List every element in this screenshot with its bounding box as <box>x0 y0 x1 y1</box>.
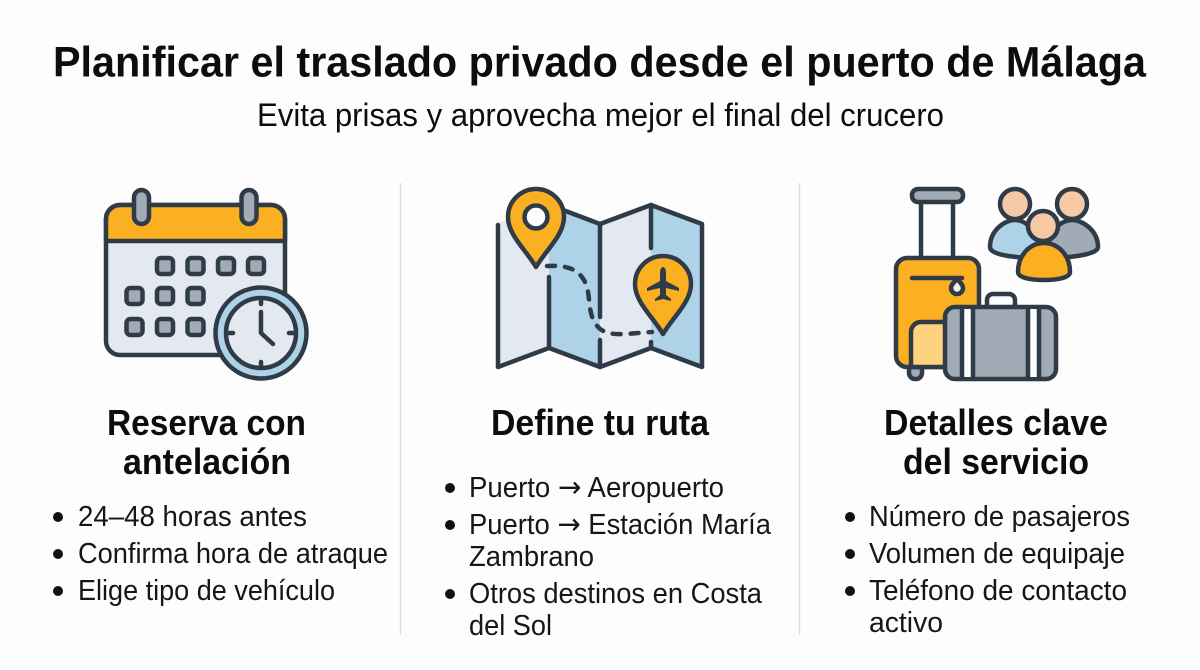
panel: detalles clave del servicio <box>845 189 1130 639</box>
bullet list: del Sol <box>469 610 552 642</box>
heading: del servicio <box>903 441 1089 482</box>
heading: Detalles clave <box>884 402 1108 443</box>
bullet list: Puerto → Estación María <box>469 507 771 541</box>
icon: luggage and passengers <box>896 189 1098 379</box>
bullet list: 24–48 horas antes <box>78 501 307 533</box>
icon: plane <box>647 267 679 301</box>
bullet list: Elige tipo de vehículo <box>78 575 335 607</box>
icon: map with pins <box>498 189 702 367</box>
bullet list: Confirma hora de atraque <box>78 538 388 570</box>
panel: reserva con antelación <box>53 190 388 607</box>
subtitle: Evita prisas y aprovecha mejor el final del crucero <box>257 97 944 133</box>
bullet list: Teléfono de contacto <box>869 575 1127 607</box>
heading: Reserva con <box>107 402 306 443</box>
bullet list: activo <box>869 607 943 639</box>
heading <box>107 402 306 482</box>
panel: define tu ruta <box>445 189 771 642</box>
icon: calendar with clock <box>106 190 306 378</box>
heading: Define tu ruta <box>491 402 710 443</box>
bullet list <box>53 501 388 607</box>
bullet list: Otros destinos en Costa <box>469 578 762 610</box>
bullet list <box>845 501 1130 639</box>
heading: antelación <box>123 441 291 482</box>
heading <box>884 402 1108 482</box>
title: Planificar el traslado privado desde el puerto de Málaga <box>53 38 1147 86</box>
bullet list: Zambrano <box>469 541 594 573</box>
bullet list <box>445 470 771 642</box>
bullet list: Número de pasajeros <box>869 501 1130 533</box>
bullet list: Puerto → Aeropuerto <box>469 470 724 504</box>
bullet list: Volumen de equipaje <box>869 538 1125 570</box>
